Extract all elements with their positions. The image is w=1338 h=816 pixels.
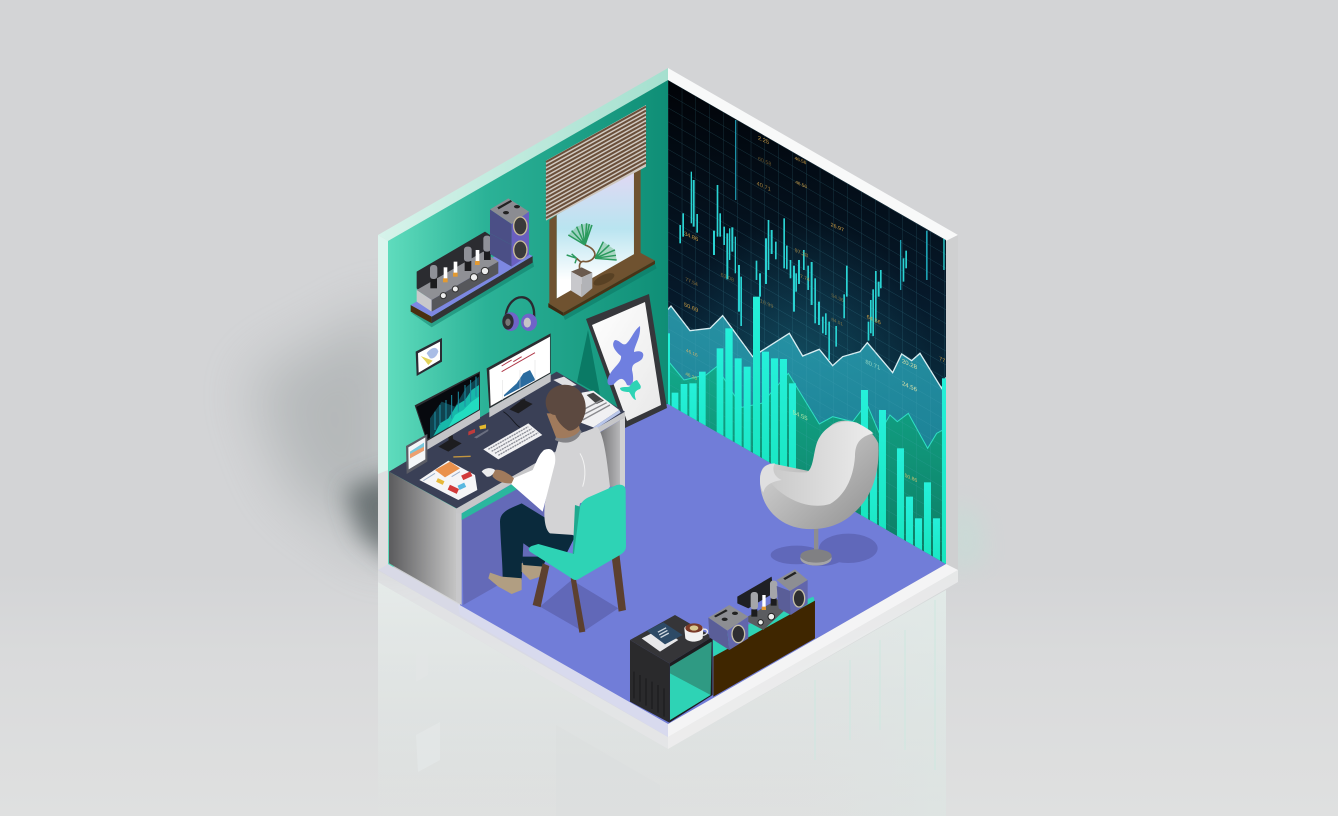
chart numbers: 64.56	[867, 314, 881, 327]
desk chair	[529, 485, 626, 580]
book stack	[642, 622, 683, 652]
chart numbers: 60.58	[758, 156, 771, 168]
monitor left	[415, 371, 480, 452]
pedestal	[800, 527, 832, 566]
floor reflection	[378, 570, 958, 816]
chart numbers: 63.08	[721, 272, 734, 284]
chart numbers: 46.56	[795, 180, 807, 191]
monitor right	[487, 333, 551, 417]
desk side panel	[389, 472, 456, 602]
chart numbers: 26.97	[831, 222, 844, 234]
chart numbers: 50.69	[684, 302, 699, 315]
chart grid	[668, 80, 946, 564]
right wall trading chart: 46.16	[686, 348, 698, 359]
coffee cup	[684, 623, 707, 642]
floor	[460, 404, 946, 724]
shelf	[411, 247, 534, 327]
chart numbers: 84.01	[831, 317, 843, 328]
amplifier	[417, 232, 498, 312]
right leg	[598, 417, 625, 487]
window frame	[549, 167, 641, 304]
desk edge	[456, 412, 625, 513]
framed poster	[586, 294, 667, 428]
right wall top rim	[668, 68, 958, 241]
neck and head	[547, 413, 580, 438]
chart numbers: 97.28	[795, 248, 808, 260]
chair shadow	[540, 580, 618, 632]
teal strip	[462, 472, 533, 520]
blue blot	[607, 326, 643, 386]
right wall trading chart: 20.28	[902, 358, 917, 372]
tablet	[406, 434, 427, 474]
floor base rim left	[378, 564, 668, 737]
cabinet	[630, 615, 713, 723]
lower area chart	[667, 360, 946, 567]
chair wooden legs	[533, 553, 626, 633]
stereo speaker right	[777, 569, 808, 615]
chart numbers: 54.36	[831, 293, 844, 304]
left wall	[388, 80, 668, 570]
stereo amplifier	[737, 577, 785, 630]
poster shadow	[577, 330, 600, 395]
wall shelf with amplifier and speakers	[411, 198, 534, 327]
stereo speaker left	[708, 605, 748, 650]
arm	[511, 449, 555, 512]
left wall end face	[378, 235, 388, 478]
left wall top rim	[378, 68, 668, 241]
potted plant	[567, 223, 617, 297]
side wing	[760, 463, 782, 493]
desk items	[453, 377, 577, 458]
right wall trading chart: 24.56	[902, 380, 917, 394]
low brown box	[713, 597, 815, 697]
shell	[760, 421, 879, 529]
seat surface	[770, 421, 873, 506]
armchair	[760, 421, 879, 566]
volume bars	[668, 296, 946, 564]
under desk shadow	[462, 440, 600, 605]
chart numbers: 16.99	[760, 298, 773, 310]
upper area chart	[667, 306, 946, 567]
chart numbers	[684, 136, 881, 328]
window glass	[557, 170, 634, 300]
floor base rim right	[668, 564, 958, 737]
monitor cable	[503, 412, 520, 427]
window with blinds and plant	[546, 105, 657, 320]
chart numbers: 34.86	[684, 231, 699, 244]
teal glow right of room	[950, 500, 985, 570]
right wall trading chart: 77	[939, 356, 945, 365]
teal blot	[620, 380, 641, 400]
keyboard	[483, 423, 542, 459]
headphones	[502, 297, 537, 331]
legs of person	[488, 503, 575, 594]
papers	[419, 461, 477, 500]
soft shadow left of room	[250, 300, 400, 566]
torso	[544, 427, 610, 535]
desk	[389, 333, 625, 605]
chart numbers: 77.54	[685, 277, 698, 288]
armchair shadow	[771, 534, 878, 566]
blinds	[546, 105, 646, 221]
hand and mouse	[493, 470, 514, 483]
right wall end face	[946, 235, 958, 570]
right wall trading chart: 80.71	[865, 359, 881, 372]
desk top	[389, 372, 625, 508]
front floor strip	[458, 604, 668, 737]
left lower end face	[378, 470, 388, 570]
chart numbers: 46.56	[795, 156, 807, 167]
chart numbers: 2.25	[758, 136, 770, 146]
speakers	[490, 198, 529, 267]
person and desk chair	[482, 385, 626, 633]
right wall trading chart: 46.28	[685, 371, 697, 382]
cabinet and stereo	[630, 569, 815, 723]
chart numbers: 40.71	[757, 181, 771, 194]
right wall trading chart	[667, 80, 947, 612]
right wall trading chart: 54.55	[793, 409, 808, 423]
right wall trading chart: 50.86	[905, 473, 917, 484]
small framed picture	[416, 338, 442, 376]
chart numbers: 7.74	[800, 274, 810, 284]
candlesticks	[679, 120, 947, 360]
window sill	[548, 252, 657, 320]
room shell	[378, 68, 958, 737]
newspaper	[581, 391, 621, 429]
